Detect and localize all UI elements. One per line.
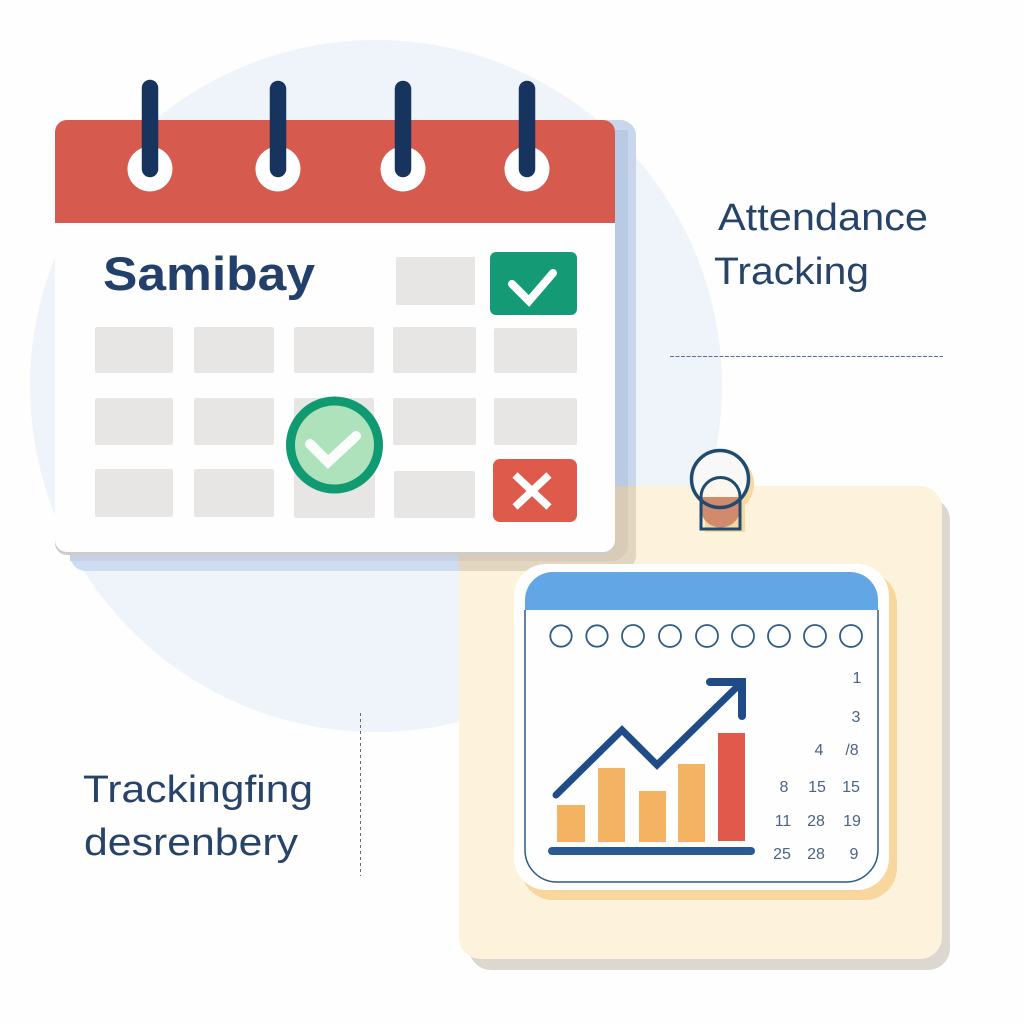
heading: Attendance Tracking: Tracking (714, 251, 869, 293)
heading: Trackingfing desrenbery (83, 769, 313, 864)
calendar title: Samibay (103, 247, 315, 300)
heading: Attendance Tracking: Attendance (718, 197, 928, 239)
date numbers: 28 (807, 813, 825, 830)
heading: Trackingfing desrenbery: Trackingfing (83, 769, 313, 811)
binder rings (128, 88, 550, 192)
date numbers: 1 (853, 670, 862, 687)
date numbers: 9 (850, 846, 859, 863)
icon: paper clip (692, 450, 754, 532)
divider line bottom (360, 713, 362, 876)
date numbers: 19 (843, 813, 861, 830)
date numbers: 4 (815, 742, 824, 759)
background circle (30, 40, 722, 732)
date numbers: 15 (842, 779, 860, 796)
icon: green check badge (490, 252, 577, 315)
binding holes (550, 625, 862, 647)
calendar day cells (95, 257, 577, 518)
date numbers: 3 (852, 709, 861, 726)
calendar header (55, 120, 615, 223)
divider line right (670, 356, 943, 358)
date numbers: 25 (773, 846, 791, 863)
date numbers: /8 (845, 742, 859, 759)
icon: red cross badge (493, 459, 577, 522)
panel: main calendar (55, 88, 636, 571)
date numbers (773, 670, 862, 863)
date numbers: 8 (780, 779, 789, 796)
date numbers: 15 (808, 779, 826, 796)
date numbers: 11 (775, 813, 791, 830)
panel: yellow note (459, 486, 950, 970)
date numbers: 28 (807, 846, 825, 863)
bar chart with trend arrow (552, 682, 751, 851)
heading: Trackingfing desrenbery: desrenbery (84, 822, 298, 864)
heading: Attendance Tracking (714, 197, 928, 293)
icon: green check circle (290, 401, 378, 489)
panel: small calendar card (514, 564, 897, 900)
